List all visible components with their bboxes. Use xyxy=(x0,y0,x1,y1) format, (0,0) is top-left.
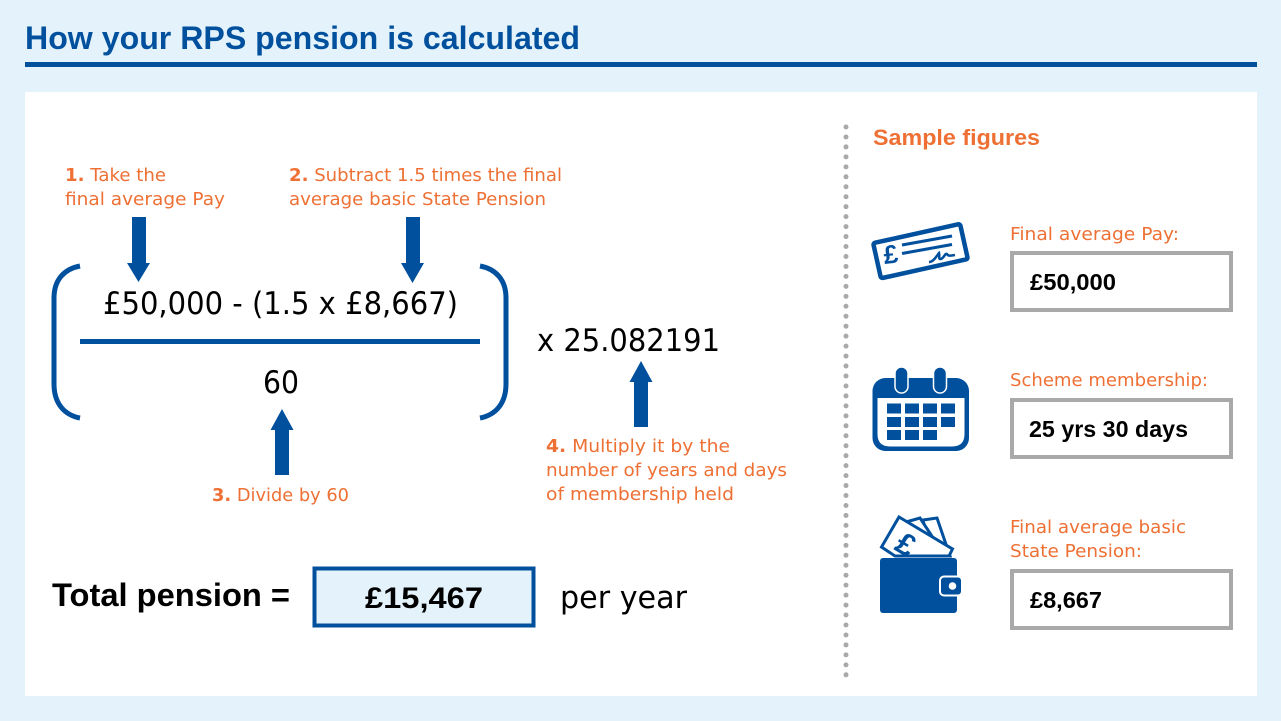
step 4 label: 4. Multiply it by the xyxy=(546,436,730,457)
label: final average pay: Final average Pay: xyxy=(1010,224,1179,245)
label: scheme membership: Scheme membership: xyxy=(1010,370,1208,391)
step 4 label: number of years and days xyxy=(546,460,787,481)
step 2 label: average basic State Pension xyxy=(289,189,546,210)
arrow: step 3 xyxy=(270,409,294,475)
panel: formula xyxy=(54,165,787,506)
icon: wallet with banknotes: £ xyxy=(889,525,922,564)
total value box xyxy=(314,568,534,626)
step 2 label xyxy=(289,165,562,210)
dotted divider xyxy=(844,127,848,675)
per year: per year xyxy=(560,580,687,616)
icon: calendar xyxy=(872,367,969,451)
value box: state pension: £8,667 xyxy=(1030,587,1102,613)
total label: Total pension = xyxy=(52,577,290,613)
right bracket xyxy=(480,266,506,418)
step 1 label xyxy=(65,165,225,210)
value box: scheme membership: 25 yrs 30 days xyxy=(1029,416,1188,442)
icon: cheque: £ xyxy=(882,239,900,270)
step 1 label: final average Pay xyxy=(65,189,225,210)
value box: scheme membership xyxy=(1012,400,1231,457)
step 2 label: 2. Subtract 1.5 times the final xyxy=(289,165,562,186)
label: final average basic state pension xyxy=(1010,517,1186,562)
step 4 label: of membership held xyxy=(546,484,734,505)
value box: final average pay: £50,000 xyxy=(1030,269,1116,295)
icon: cheque xyxy=(873,224,968,278)
arrow: step 1 xyxy=(127,217,150,282)
sample figures heading: Sample figures xyxy=(873,125,1040,150)
left bracket xyxy=(54,266,80,418)
multiplier: x 25.082191 xyxy=(537,323,720,359)
denominator: 60 xyxy=(263,365,299,401)
panel: sample figures xyxy=(872,125,1231,628)
value box: final average pay xyxy=(1012,253,1231,310)
arrow: step 4 xyxy=(630,361,652,427)
label: final average basic state pension: Final average basic xyxy=(1010,517,1186,538)
arrow: step 2 xyxy=(401,217,424,283)
total pension row xyxy=(52,568,687,626)
step 4 label xyxy=(546,436,787,505)
label: final average basic state pension: State Pension: xyxy=(1010,541,1142,562)
title: How your RPS pension is calculated xyxy=(25,20,580,56)
numerator: £50,000 - (1.5 x £8,667) xyxy=(103,286,458,322)
total value: £15,467 xyxy=(365,582,483,615)
value box: state pension xyxy=(1012,571,1231,628)
icon: wallet with banknotes xyxy=(880,517,962,613)
step 1 label: 1. Take the xyxy=(65,165,166,186)
step 3 label: 3. Divide by 60 xyxy=(212,485,349,506)
fraction bar xyxy=(80,339,480,344)
